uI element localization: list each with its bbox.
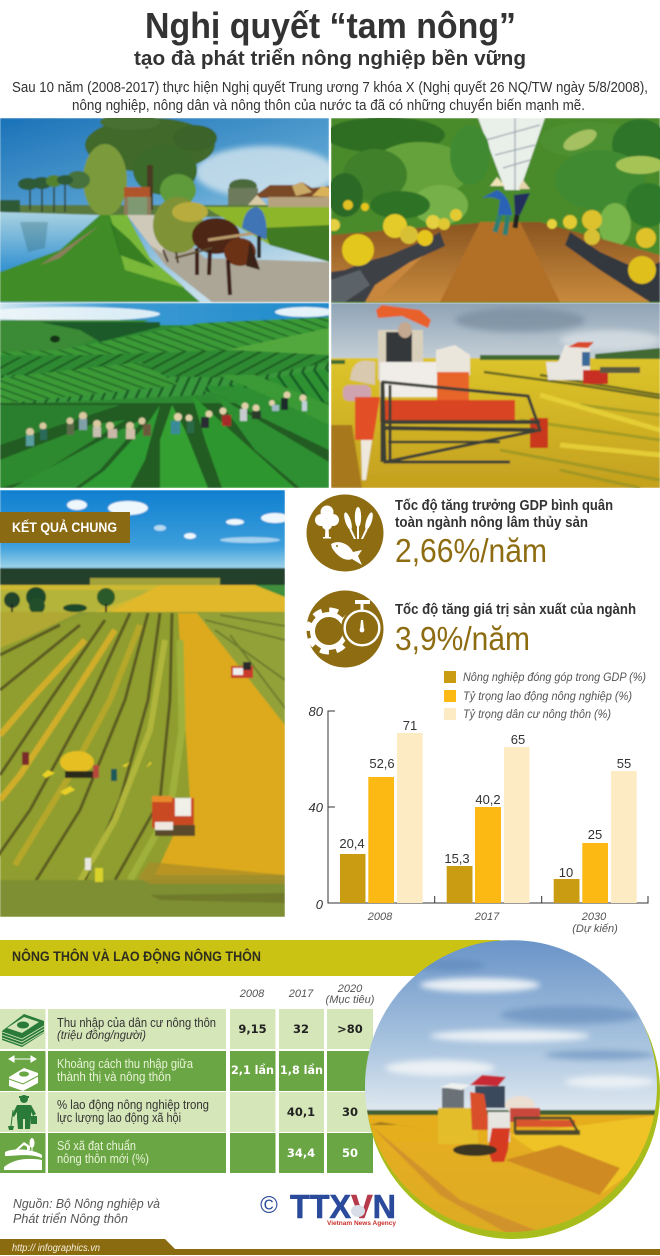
bar chart: 2008 (367, 911, 393, 923)
table row: agricultural labour: 30 (342, 1105, 358, 1119)
icon: tree, wheat and fish (306, 494, 384, 572)
section heading band (0, 940, 500, 976)
source note: Nguồn: Bộ Nông nghiệp và (13, 1196, 160, 1211)
table header: 2020 (337, 983, 363, 995)
bar chart: 10 (559, 865, 573, 880)
table row: income gap (0, 1051, 373, 1091)
chart legend: Tỷ trọng lao động nông nghiệp (%) (463, 689, 632, 703)
table row: agricultural labour: lực lượng lao động xã hội (57, 1111, 181, 1125)
table row: income (0, 1009, 373, 1049)
chart legend: Tỷ trọng dân cư nông thôn (%) (463, 707, 611, 721)
bar chart: 65 (511, 732, 525, 747)
table header: 2008 (239, 988, 265, 1000)
photo: tea hills with workers (0, 303, 335, 488)
table row: new rural communes: 34,4 (287, 1146, 315, 1160)
logo: TTXVN: Vietnam News Agency (327, 1221, 397, 1227)
copyright mark: © (260, 1192, 278, 1219)
table row: income gap: Khoảng cách thu nhập giữa (57, 1057, 193, 1071)
source note (13, 1196, 160, 1226)
bar chart: 20,4 (339, 836, 365, 851)
table row: new rural communes: 50 (342, 1146, 358, 1160)
table row: income: 9,15 (238, 1022, 267, 1036)
table row: income: Thu nhập của dân cư nông thôn (57, 1016, 216, 1030)
title: Nghị quyết “tam nông” (145, 5, 516, 46)
label: Kết quả chung (0, 512, 130, 543)
stat: production value growth (395, 602, 636, 657)
table row: new rural communes: nông thôn mới (%) (57, 1152, 149, 1166)
photo: village road with ox cart (0, 114, 335, 303)
intro text (12, 80, 648, 114)
stat: GDP growth: toàn ngành nông lâm thủy sản (395, 515, 588, 531)
bar chart: 0 (316, 897, 324, 912)
icon: new rural house (4, 1138, 42, 1170)
icon: money stack (2, 1014, 44, 1047)
chart legend (444, 670, 646, 721)
table row: agricultural labour: 40,1 (287, 1105, 315, 1119)
section heading band: NÔNG THÔN VÀ LAO ĐỘNG NÔNG THÔN (12, 949, 261, 964)
table row: agricultural labour: % lao động nông nghiệp trong (57, 1098, 209, 1112)
bar chart (309, 704, 648, 935)
chart legend: Nông nghiệp đóng góp trong GDP (%) (463, 670, 646, 684)
bar chart: 25 (588, 827, 602, 842)
table row: income gap: 1,8 lần (280, 1063, 323, 1077)
stat: GDP growth: 2,66%/năm (395, 532, 547, 569)
bar chart: 40 (309, 800, 324, 815)
bar chart: 71 (403, 718, 417, 733)
table header: 2017 (288, 988, 314, 1000)
table row: new rural communes (0, 1133, 373, 1173)
table row: income: (triệu đồng/người) (57, 1028, 146, 1042)
bar chart: 2017 (474, 911, 500, 923)
footer bar (0, 1239, 660, 1255)
table header: (Mục tiêu) (326, 994, 375, 1006)
table row: income gap: 2,1 lần (231, 1063, 274, 1077)
bar chart: (Dự kiến) (572, 923, 618, 935)
source note: Phát triển Nông thôn (13, 1211, 128, 1226)
icon: income gap arrows and money (9, 1056, 38, 1091)
intro text: nông nghiệp, nông dân và nông thôn của nước ta đã có những chuyển biến mạnh mẽ. (72, 98, 585, 114)
stat: GDP growth: Tốc độ tăng trưởng GDP bình quân (395, 498, 613, 514)
bar chart: 55 (617, 756, 631, 771)
table header (239, 983, 375, 1006)
photo: melon greenhouse (325, 117, 660, 303)
table row: income: 32 (293, 1022, 309, 1036)
stat: GDP growth (395, 498, 613, 569)
bar chart: 2030 (581, 911, 607, 923)
bar chart: 15,3 (444, 851, 470, 866)
round photo: combine harvester (360, 940, 660, 1245)
icon: gear and stopwatch (306, 590, 384, 668)
photo: harvesters on rice field (331, 303, 660, 488)
table row: new rural communes: Số xã đạt chuẩn (57, 1139, 136, 1153)
logo: TTXVN: TTXVN (290, 1188, 396, 1225)
subtitle: tạo đà phát triển nông nghiệp bền vững (134, 48, 526, 70)
bar chart: 80 (309, 704, 324, 719)
footer bar: http:// infographics.vn (12, 1243, 100, 1254)
photo: rice field panorama (0, 490, 289, 917)
table row: income gap: thành thị và nông thôn (57, 1070, 171, 1084)
table row: agricultural labour (0, 1092, 373, 1132)
icon: farmer with fork and bucket (8, 1095, 37, 1130)
bar chart: 40,2 (475, 792, 501, 807)
stat: production value growth: 3,9%/năm (395, 620, 530, 657)
bar chart: 52,6 (369, 756, 395, 771)
label: Kết quả chung: KẾT QUẢ CHUNG (12, 520, 117, 535)
table row: income: >80 (337, 1022, 363, 1036)
stat: production value growth: Tốc độ tăng giá trị sản xuất của ngành (395, 602, 636, 618)
